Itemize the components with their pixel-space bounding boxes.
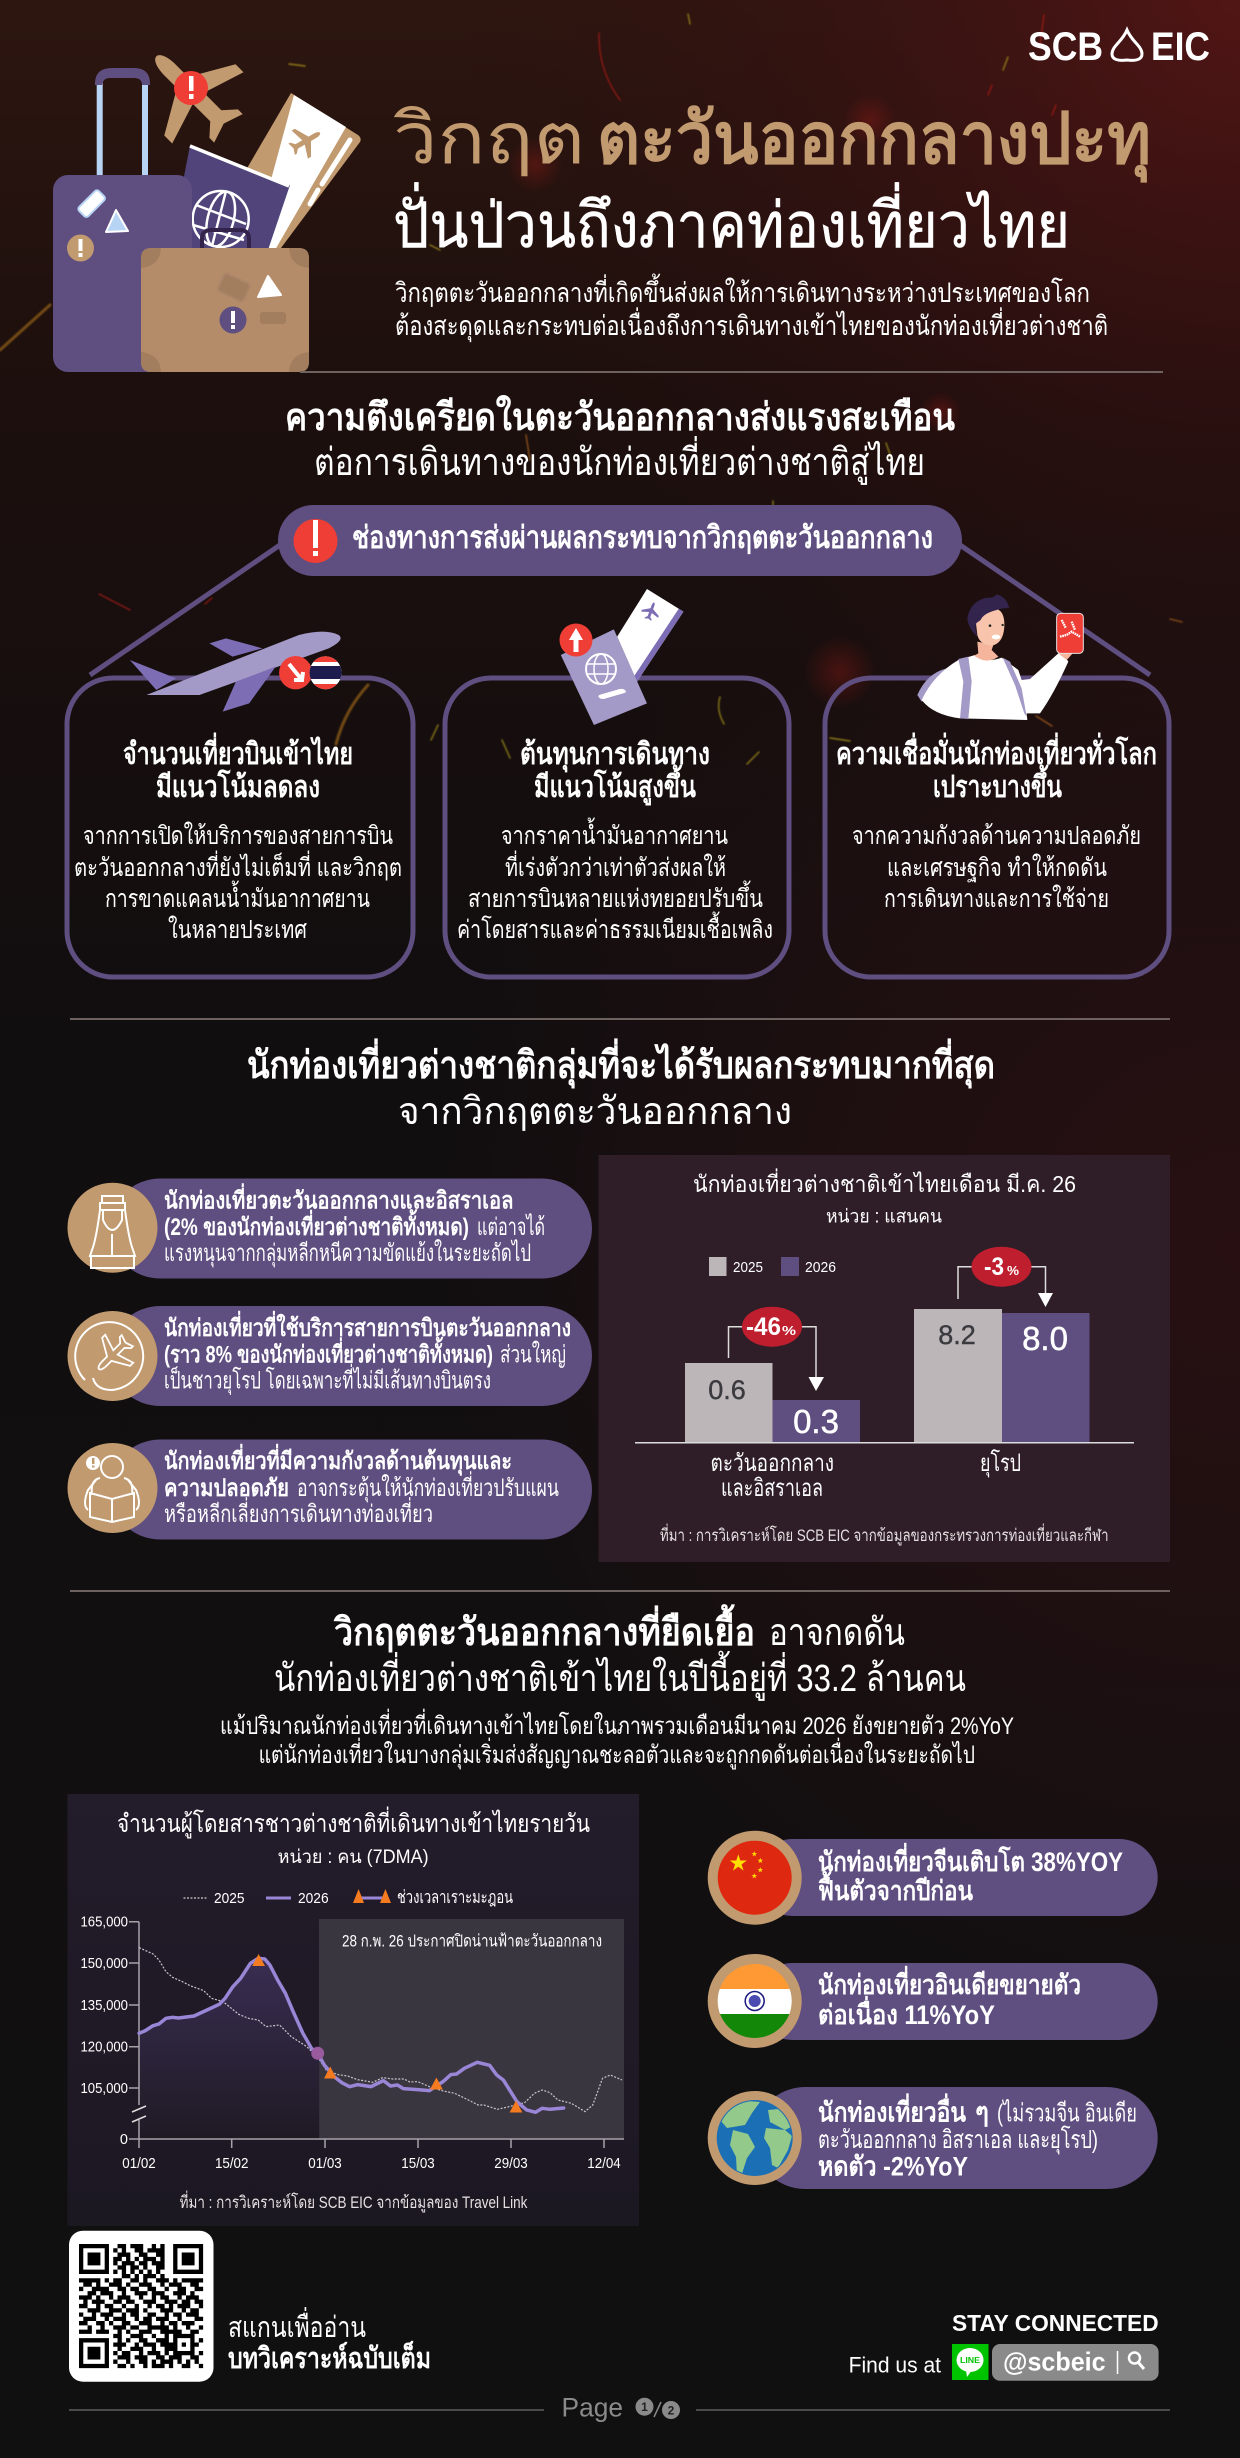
scan caption [228, 2307, 431, 2375]
icon: LINE [952, 2344, 988, 2380]
callout: other tourists: นักท่องเที่ยวอื่น [818, 2093, 966, 2128]
category labels: ยุโรป [980, 1449, 1021, 1478]
intro paragraph: แม้ปริมาณนักท่องเที่ยวที่เดินทางเข้าไทยโดยในภาพรวมเดือนมีนาคม 2026 ยังขยายตัว 2%YoY [220, 1708, 1014, 1740]
heading: tension in the Middle East: ความตึงเครียดในตะวันออกกลางส่งแรงสะเทือน [285, 395, 955, 439]
line: 2025 [139, 1948, 622, 2112]
icon: plane in circle [68, 1311, 158, 1401]
icon: traveller with map [68, 1443, 158, 1533]
callout: India tourists [708, 1954, 1158, 2048]
title: วิกฤต [393, 100, 585, 179]
icon: purple suitcase [53, 68, 192, 372]
intro paragraph: แต่นักท่องเที่ยวในบางกลุ่มเริ่มส่งสัญญาณชะลอตัวและจะถูกกดดันต่อเนื่องในระยะถัดไป [259, 1737, 975, 1770]
panel: March 2026 arrivals bar chart [598, 1155, 1170, 1562]
icon: passport, ticket, up arrow [560, 589, 683, 725]
callout: cost and safety concerned tourists: ความปลอดภัย [164, 1475, 289, 1502]
callout: Middle Eastern airline users [68, 1306, 592, 1406]
callout: India tourists: นักท่องเที่ยวอินเดียขยายตัว [818, 1965, 1081, 2000]
icon: plane with alert [121, 21, 264, 164]
y axis labels: 165,000 [80, 1914, 128, 1930]
icon: passport with globe [184, 144, 290, 248]
card body: การเดินทางและการใช้จ่าย [884, 884, 1109, 913]
x axis labels: 15/03 [401, 2156, 435, 2172]
legend: 2026 [298, 1890, 329, 1907]
title [393, 100, 1151, 261]
heading: most affected tourists: จากวิกฤตตะวันออกกลาง [398, 1091, 792, 1133]
callout: Middle East and Israel tourists: แต่อาจได้ [477, 1213, 545, 1241]
card body: ที่เร่งตัวกว่าเท่าตัวส่งผลให้ [505, 850, 726, 882]
x axis labels: 29/03 [494, 2156, 528, 2172]
heading: prolonged crisis: วิกฤตตะวันออกกลางที่ยืดเยื้อ [333, 1604, 755, 1654]
y axis labels: 135,000 [80, 1998, 128, 2014]
callout: Middle East and Israel tourists: (2% ของนักท่องเที่ยวต่างชาติทั้งหมด) [164, 1208, 469, 1241]
card body: ค่าโดยสารและค่าธรรมเนียมเชื้อเพลิง [457, 911, 773, 944]
callout: other tourists [708, 2087, 1158, 2189]
page indicator: Page [562, 2393, 623, 2423]
card body [457, 817, 773, 944]
panel: flights [67, 632, 413, 977]
card body: สายการบินหลายแห่งทยอยปรับขึ้น [468, 880, 763, 913]
callout: -3% change: % [1007, 1263, 1019, 1278]
chart title [117, 1806, 590, 1868]
x axis labels [122, 2156, 621, 2172]
card body: จากราคาน้ำมันอากาศยาน [501, 817, 728, 850]
panel: travel cost [445, 589, 789, 977]
x axis labels: 01/02 [122, 2156, 156, 2172]
heading: prolonged crisis [274, 1604, 966, 1701]
connector lines from pill to cards [90, 545, 1150, 675]
legend: 2025 [733, 1260, 763, 1276]
marker: airspace closure date [311, 2047, 324, 2060]
intro paragraph [220, 1708, 1014, 1770]
callout: Middle East and Israel tourists: แรงหนุนจากกลุ่มหลีกหนีความขัดแย้งในระยะถัดไป [164, 1239, 531, 1268]
card body: ตะวันออกกลางที่ยังไม่เต็มที่ และวิกฤต [74, 850, 402, 882]
callout: Middle Eastern airline users: ส่วนใหญ่ [500, 1341, 566, 1369]
area under 2026 line [139, 1958, 319, 2139]
bars: Europe [914, 1309, 1090, 1442]
logo: SCB EIC: SCB [1028, 25, 1103, 69]
page indicator: 1 [641, 2400, 648, 2414]
page indicator: 2 [668, 2404, 675, 2418]
callout: China tourists: นักท่องเที่ยวจีนเติบโต 38%YOY [818, 1842, 1123, 1877]
bars: Middle East and Israel: 0.3 [793, 1403, 839, 1440]
y axis labels [80, 1914, 128, 2148]
y axis labels: 105,000 [80, 2081, 128, 2097]
panel: daily passengers line chart [68, 1794, 639, 2226]
card title: ความเชื่อมั่นนักท่องเที่ยวทั่วโลก [836, 732, 1157, 771]
callout: -3% change [958, 1247, 1053, 1307]
legend [184, 1887, 513, 1907]
callout: Middle Eastern airline users: (ราว 8% ของนักท่องเที่ยวต่างชาติทั้งหมด) [164, 1336, 493, 1369]
card body [74, 821, 402, 944]
icon: plane with down arrow and Thai flag [130, 632, 342, 712]
callout: cost and safety concerned tourists [68, 1440, 592, 1540]
stay connected: Find us at [849, 2353, 941, 2378]
bars: Europe: 8.0 [1022, 1320, 1068, 1357]
callout: other tourists: หดตัว -2%YoY [818, 2152, 968, 2182]
intro text [395, 273, 1108, 343]
icon: LINE: LINE [960, 2356, 981, 2365]
callout: China tourists [708, 1831, 1158, 1925]
heading: most affected tourists [247, 1038, 995, 1133]
icon: boarding ticket [244, 93, 361, 252]
x axis labels: 12/04 [587, 2156, 621, 2172]
callout: cost and safety concerned tourists: นักท่องเที่ยวที่มีความกังวลด้านต้นทุนและ [164, 1443, 512, 1477]
page indicator [69, 2393, 1170, 2423]
icon: brown suitcase [141, 230, 309, 372]
chart title: นักท่องเที่ยวต่างชาติเข้าไทยเดือน มี.ค. 26 [693, 1168, 1076, 1197]
scan caption: บทวิเคราะห์ฉบับเต็ม [228, 2340, 431, 2375]
chart title: จำนวนผู้โดยสารชาวต่างชาติที่เดินทางเข้าไทยรายวัน [117, 1806, 590, 1839]
shaded period after airspace closure [319, 1919, 624, 2139]
callout: China tourists: ฟื้นตัวจากปีก่อน [818, 1870, 973, 1906]
search box: @scbeic: @scbeic [1003, 2347, 1106, 2377]
legend: ช่วงเวลาเราะมะฎอน [397, 1887, 513, 1907]
callout: -46% change: -46 [746, 1313, 781, 1341]
bars: Middle East and Israel: 0.6 [708, 1375, 746, 1405]
y axis labels: 150,000 [80, 1956, 128, 1972]
callout: other tourists: ๆ [975, 2098, 989, 2128]
x axis labels: 15/02 [215, 2156, 248, 2172]
logo: SCB EIC [1028, 25, 1210, 69]
callout: cost and safety concerned tourists: อาจกระตุ้นให้นักท่องเที่ยวปรับแผน [297, 1471, 559, 1503]
category labels: ตะวันออกกลาง [710, 1450, 834, 1477]
source note: ที่มา : การวิเคราะห์โดย SCB EIC จากข้อมูลของกระทรวงการท่องเที่ยวและกีฬา [660, 1523, 1108, 1546]
callout: -3% change: -3 [984, 1253, 1004, 1281]
card body: จากการเปิดให้บริการของสายการบิน [83, 821, 393, 850]
logo: SCB EIC: EIC [1151, 25, 1210, 69]
stay connected: STAY CONNECTED [952, 2310, 1159, 2336]
axes [129, 1922, 624, 2148]
source note: ที่มา : การวิเคราะห์โดย SCB EIC จากข้อมูลของ Travel Link [180, 2190, 528, 2213]
callout: Middle Eastern airline users: นักท่องเที่ยวที่ใช้บริการสายการบินตะวันออกกลาง [164, 1310, 571, 1342]
card title [123, 732, 353, 804]
card title: เปราะบางขึ้น [933, 764, 1062, 804]
category labels [710, 1449, 1021, 1502]
heading: prolonged crisis: นักท่องเที่ยวต่างชาติเข้าไทยในปีนี้อยู่ที่ 33.2 ล้านคน [274, 1650, 966, 1701]
icon: Middle Eastern traveller [68, 1183, 158, 1273]
transmission channels pill [278, 505, 962, 576]
legend: 2026 [805, 1260, 836, 1276]
card body [852, 822, 1141, 913]
card body: จากความกังวลด้านความปลอดภัย [852, 822, 1141, 850]
callout: India tourists: ต่อเนื่อง 11%YoY [818, 1995, 995, 2030]
card body: ในหลายประเทศ [168, 915, 307, 944]
Ramadan markers [252, 1954, 522, 2112]
callout: -46% change: % [782, 1323, 797, 1338]
callout: Middle East and Israel tourists [68, 1178, 592, 1278]
card title: ต้นทุนการเดินทาง [520, 738, 710, 773]
title: ปั่นป่วนถึงภาคท่องเที่ยวไทย [393, 182, 1070, 261]
heading: prolonged crisis: อาจกดดัน [769, 1612, 905, 1654]
card title [520, 738, 710, 806]
icon: India flag [708, 1954, 802, 2048]
callout: other tourists: ตะวันออกกลาง อิสราเอล และยุโรป) [818, 2125, 1098, 2155]
chart title: หน่วย : คน (7DMA) [278, 1847, 429, 1868]
chart title: หน่วย : แสนคน [826, 1207, 942, 1228]
heading: most affected tourists: นักท่องเที่ยวต่างชาติกลุ่มที่จะได้รับผลกระทบมากที่สุด [247, 1038, 995, 1089]
card body: และเศรษฐกิจ ทำให้กดดัน [887, 853, 1107, 882]
chart title [693, 1168, 1076, 1228]
line: 2026 [139, 1958, 564, 2112]
legend [709, 1257, 836, 1276]
stay connected [849, 2310, 1159, 2381]
category labels: และอิสราเอล [721, 1475, 823, 1502]
bars: Middle East and Israel [685, 1363, 860, 1442]
callout: cost and safety concerned tourists: หรือหลีกเลี่ยงการเดินทางท่องเที่ยว [164, 1497, 433, 1528]
heading: tension in the Middle East: ต่อการเดินทางของนักท่องเที่ยวต่างชาติสู่ไทย [314, 436, 925, 485]
transmission channels pill: ช่องทางการส่งผ่านผลกระทบจากวิกฤตตะวันออกกลาง [352, 520, 933, 555]
card title: มีแนวโน้มสูงขึ้น [534, 764, 696, 806]
x axis labels: 01/03 [308, 2156, 342, 2172]
icon: worried traveller with phone [917, 594, 1083, 720]
callout: Middle Eastern airline users: เป็นชาวยุโรป โดยเฉพาะที่ไม่มีเส้นทางบินตรง [164, 1364, 491, 1396]
icon: alert [294, 519, 338, 563]
card body: การขาดแคลนน้ำมันอากาศยาน [105, 880, 370, 913]
card title [836, 732, 1157, 804]
annotation: 28 ก.พ. 26 ประกาศปิดน่านฟ้าตะวันออกกลาง [342, 1932, 602, 1951]
y axis labels: 0 [120, 2132, 128, 2148]
icon: China flag [708, 1831, 802, 1925]
hero illustration: luggage, passport, ticket, plane [53, 21, 361, 372]
callout: other tourists: (ไม่รวมจีน อินเดีย [997, 2099, 1137, 2128]
card title: จำนวนเที่ยวบินเข้าไทย [123, 732, 353, 771]
scan caption: สแกนเพื่ออ่าน [228, 2307, 366, 2344]
y axis labels: 120,000 [80, 2040, 128, 2056]
icon: globe [708, 2091, 802, 2185]
panel: traveller confidence [825, 594, 1169, 977]
title: ตะวันออกกลางปะทุ [597, 100, 1151, 183]
QR code [69, 2231, 214, 2382]
bars: Europe: 8.2 [938, 1320, 976, 1350]
search box: @scbeic [992, 2344, 1159, 2381]
callout: Middle East and Israel tourists: นักท่องเที่ยวตะวันออกกลางและอิสราเอล [164, 1183, 514, 1215]
callout: -46% change [728, 1307, 824, 1391]
intro text: วิกฤตตะวันออกกลางที่เกิดขึ้นส่งผลให้การเดินทางระหว่างประเทศของโลก [395, 273, 1090, 308]
legend: 2025 [214, 1890, 244, 1907]
card title: มีแนวโน้มลดลง [156, 768, 320, 804]
heading: tension in the Middle East [285, 395, 955, 485]
